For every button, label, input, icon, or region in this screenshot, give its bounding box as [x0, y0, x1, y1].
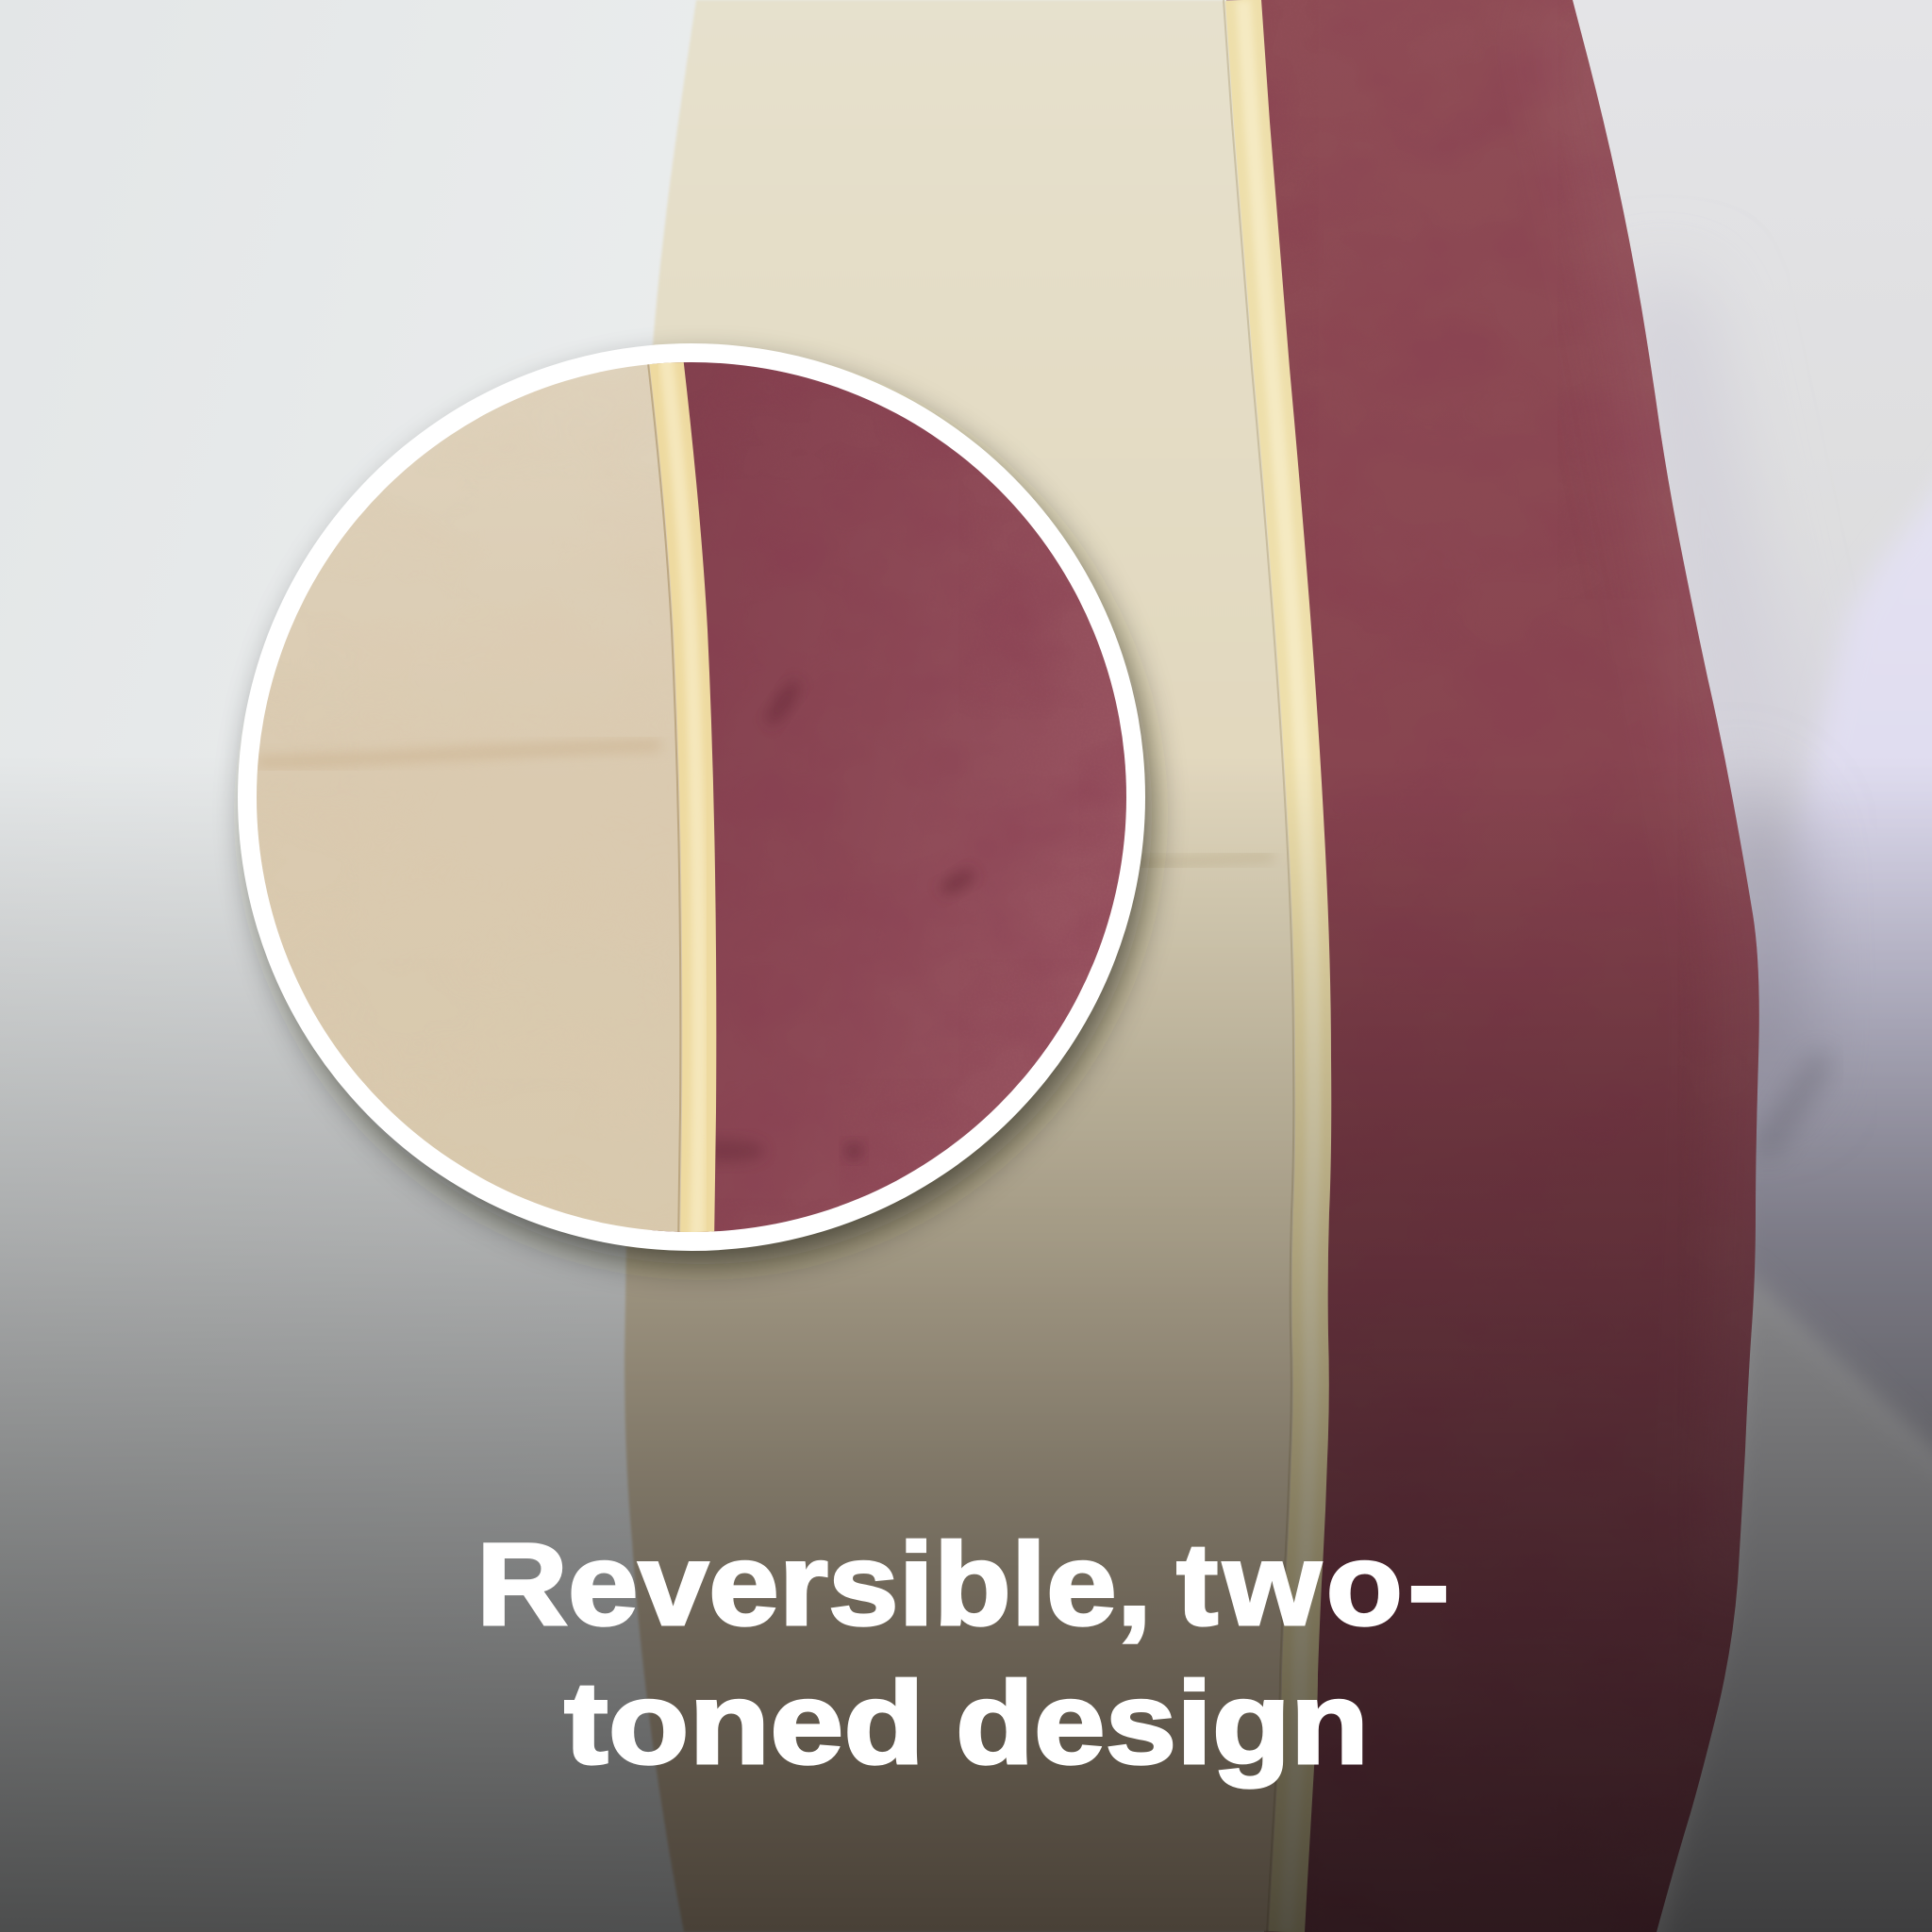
- zoom circle callout: [238, 343, 1179, 1251]
- pillow: stitch line: [1224, 0, 1293, 1932]
- headline line 2: [564, 1658, 1369, 1789]
- pillow: burgundy velvet side: [1217, 0, 1783, 1932]
- pillow: piping seam: [1243, 0, 1313, 1932]
- zoom circle: white ring: [238, 343, 1145, 1251]
- magnified stitch line: [648, 363, 680, 1245]
- pillow: [625, 0, 1783, 1932]
- magnified crease: [257, 745, 660, 762]
- magnified cream velvet: [245, 349, 699, 1245]
- headline line 2: design: [956, 1658, 1369, 1789]
- headline line 1: [476, 1520, 1455, 1650]
- headline: [476, 1520, 1455, 1789]
- pillow: crease on cream side: [1132, 857, 1274, 864]
- headline line 1: two-: [1176, 1520, 1455, 1650]
- pillow: cream velvet side: [625, 0, 1313, 1932]
- headline line 2: toned: [564, 1658, 924, 1789]
- magnified piping: [665, 349, 699, 1245]
- dark bottom gradient overlay: [0, 755, 1932, 1932]
- magnified burgundy velvet: [651, 362, 1126, 1232]
- zoom circle: fabric detail: [245, 349, 1179, 1245]
- zoom circle drop shadow: [250, 362, 1152, 1264]
- headline line 1: Reversible,: [476, 1520, 1152, 1650]
